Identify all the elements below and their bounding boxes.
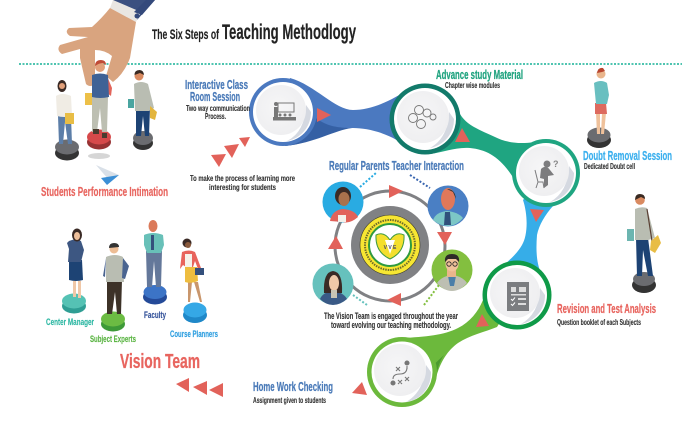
logo: V V E [384,245,397,251]
caption [324,311,458,330]
step: revision and test circle [482,260,552,330]
logo [351,206,429,284]
step 1 text: Two way communication [186,103,250,113]
step 1 description: interesting for students [209,182,276,192]
dotted links [353,173,439,305]
connector arrows [317,108,544,395]
heading: vision team: Vision Team [120,351,200,373]
avatar: parent man with tie [428,186,468,226]
avatar: parent woman [322,182,364,222]
step 1 description [190,173,295,192]
arrows: red triangles to interactive session [211,137,250,167]
title: Teaching Methodlogy [222,21,356,44]
figure: subject expert [101,243,129,332]
step 2 text: Advance study Material [436,67,523,82]
caption: The Vision Team is engaged throughout the year [324,311,458,321]
heading: students performance: Students Performance Intimation [41,184,168,199]
panel: vision team: Subject Experts [90,334,136,345]
panel: vision team: Course Planners [170,329,218,340]
step 1 text: Interactive Class [185,77,248,92]
ring [335,191,445,301]
panel: parents teacher interaction [312,158,472,330]
step 1 text: Room Session [190,89,240,104]
step 1 text [185,77,250,121]
step 1 text: Process. [205,111,226,121]
avatar: woman in suit [312,264,354,305]
step 3 text: Dedicated Doubt cell [584,161,635,171]
figure: man with bag right [627,194,661,293]
step 4 text: Question booklet of each Subjects [557,317,641,327]
panel: students group [55,60,157,160]
heading: Regular Parents Teacher Interaction [329,158,464,173]
icon: classroom teacher [273,102,296,120]
figure: faculty [143,220,167,304]
icon: question booklet [507,282,529,311]
step 2 text [436,67,523,90]
icon: hand picking student [58,0,155,86]
step 5 text [253,379,333,405]
step 5 text: Home Work Checking [253,379,333,394]
title [152,21,356,44]
icon: strategy play [391,361,409,385]
step 3 text [583,148,672,171]
step 4 text [557,301,656,327]
title: The Six Steps of [152,27,219,42]
panel: vision team [46,220,223,397]
icon: thinking student: ? [553,159,558,169]
step 5 text: Assignment given to students [253,395,326,405]
step: doubt removal circle [512,139,580,207]
figure: course planner [180,238,207,323]
icon: student man with bag on pedestal [128,70,157,150]
ring arrows [328,185,452,306]
icon: paper plane [96,165,119,185]
step: home work circle [367,337,437,407]
avatar: teacher with glasses [432,250,472,291]
icon: student man lifted on red pedestal [85,60,112,159]
figure: center manager [62,228,86,314]
labels: Center Manager [46,317,94,328]
arrows: vision team [176,378,223,397]
panel: vision team: Faculty [144,310,166,321]
step: interactive class room session circle [249,78,317,146]
step 2 text: Chapter wise modules [445,80,500,90]
step: advance study circle [390,84,460,154]
icon: study modules [408,106,436,128]
icon: student woman on pedestal [55,80,79,160]
step connectors [283,78,553,380]
caption: toward evolving our teaching methodology. [331,320,451,330]
step 1 description: To make the process of learning more [190,173,295,183]
figure: woman on pedestal top right [587,68,611,148]
